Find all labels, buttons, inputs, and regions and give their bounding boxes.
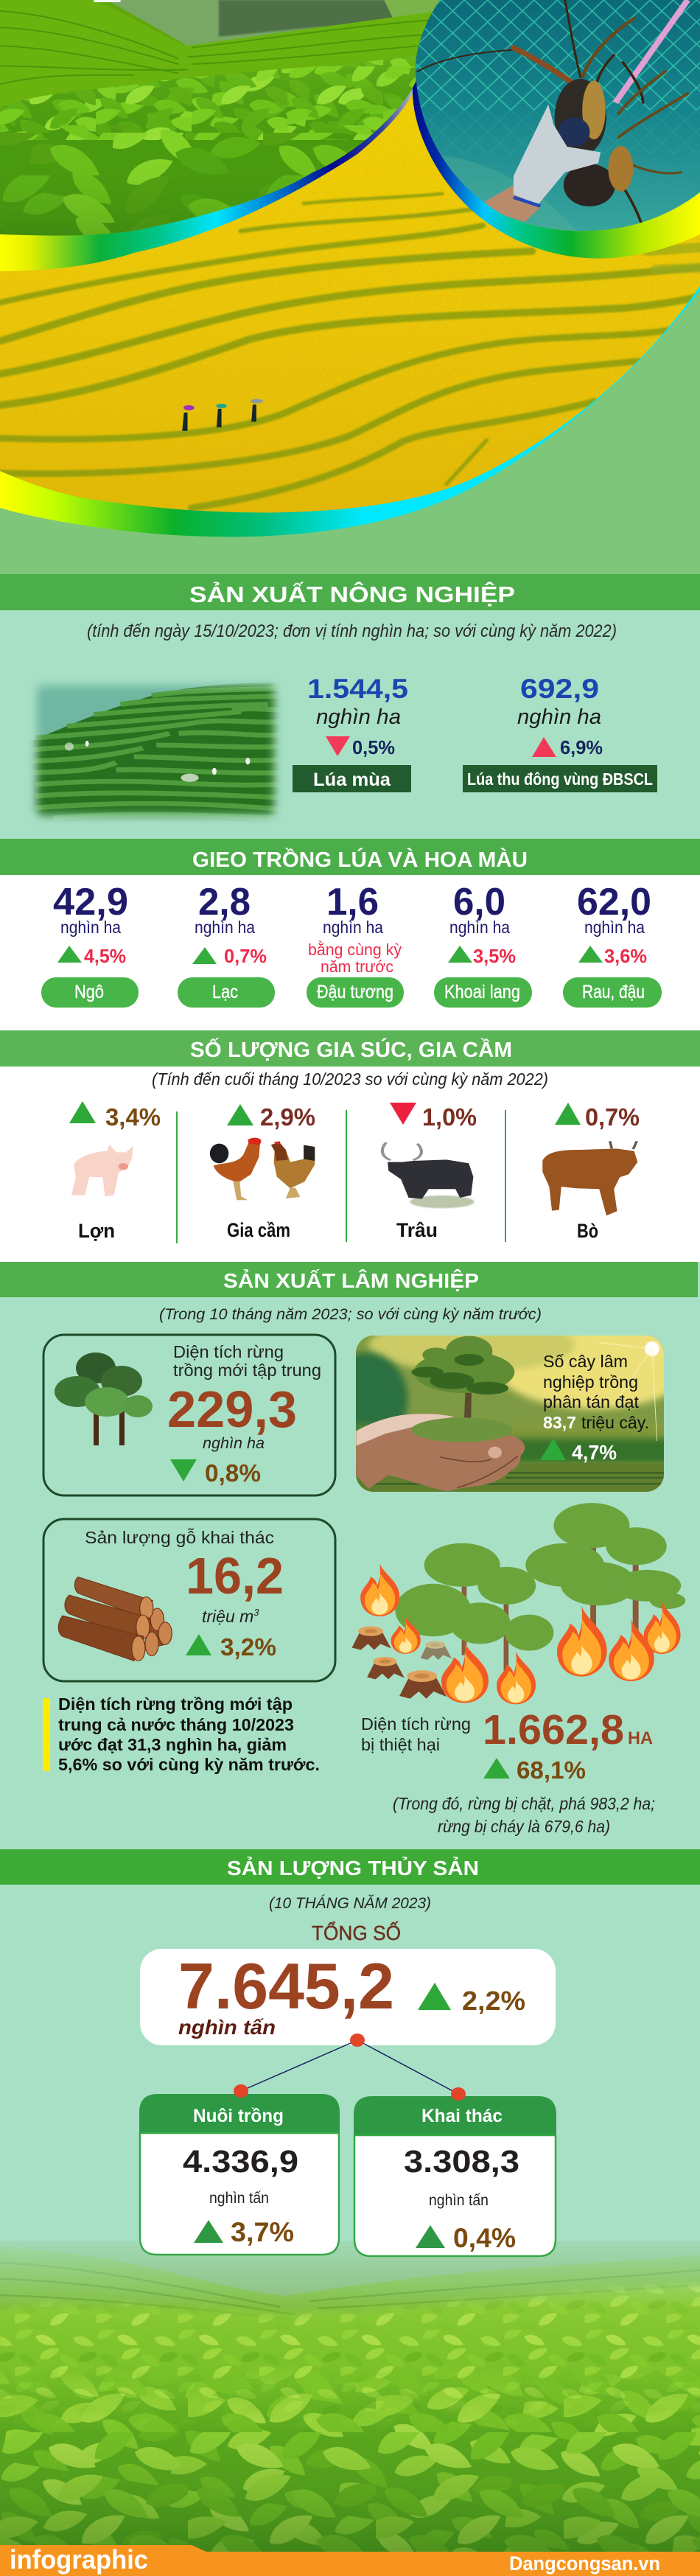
- hero photo collage: [0, 0, 700, 574]
- stat: ngô: nghìn ha: [60, 918, 121, 937]
- photo: tea hills and leaves: [0, 0, 447, 243]
- footer bar: infographic: [10, 2544, 148, 2575]
- card: khai thác: nghìn tấn: [429, 2192, 489, 2209]
- heading bar: GIEO TRỒNG LÚA VÀ HOA MÀU: [192, 847, 528, 872]
- stat: lúa thu đông: 6,9%: [560, 736, 603, 758]
- card: khai thác: Khai thác: [421, 2106, 503, 2126]
- card: timber output: 3,2%: [220, 1633, 276, 1661]
- note: new planted forest in October: trung cả nước tháng 10/2023: [58, 1715, 294, 1734]
- heading bar: SẢN XUẤT LÂM NGHIỆP: [223, 1268, 479, 1292]
- heading bar: SẢN XUẤT NÔNG NGHIỆP: [189, 581, 515, 607]
- card: scattered trees photo: triệu cây.: [581, 1413, 649, 1432]
- stat: lạc: 2,8: [198, 881, 251, 924]
- stat: lạc: 0,7%: [224, 945, 267, 967]
- stat: trâu: Trâu: [396, 1219, 438, 1241]
- stat: rau đậu: nghìn ha: [584, 918, 645, 937]
- stat: lạc: nghìn ha: [195, 918, 255, 937]
- stat: damaged forest area: Diện tích rừng: [361, 1714, 471, 1734]
- heading bar: SẢN LƯỢNG THỦY SẢN: [227, 1856, 479, 1879]
- photo: tea hills and leaves at bottom: [0, 2241, 700, 2552]
- icon: trees: [55, 1352, 153, 1445]
- subtitle: (tính đến ngày 15/10/2023; đơn vị tính nghìn ha; so với cùng kỳ năm 2022): [87, 621, 617, 641]
- stat: rau đậu: [563, 881, 662, 1008]
- icon: cow: [542, 1141, 637, 1215]
- stat: đậu tương: nghìn ha: [323, 918, 383, 937]
- stat: rau đậu: 3,6%: [604, 945, 647, 967]
- card: scattered trees photo: Số cây lâm: [543, 1352, 628, 1371]
- stat: ngô: 42,9: [53, 881, 128, 924]
- stat: lạc: [178, 881, 275, 1008]
- stat: damaged forest area: bị thiệt hại: [361, 1735, 440, 1754]
- stat: bò: 0,7%: [585, 1103, 640, 1131]
- note: new planted forest in October: ước đạt 31,3 nghìn ha, giảm: [58, 1735, 287, 1754]
- heading bar: SỐ LƯỢNG GIA SÚC, GIA CẦM: [190, 1037, 512, 1062]
- stat: đậu tương: năm trước: [321, 957, 393, 976]
- illustration: forest with fires and stumps: [352, 1503, 685, 1704]
- stat: lúa mùa: 0,5%: [352, 736, 395, 758]
- card: timber output: 3: [253, 1607, 259, 1618]
- total label: TỔNG SỐ: [312, 1921, 401, 1944]
- stat: damaged forest area: 1.662,8: [483, 1706, 624, 1753]
- stat: lúa thu đông: 692,9: [520, 674, 599, 704]
- card: timber output: triệu m: [202, 1607, 253, 1626]
- stat: khoai lang: nghìn ha: [449, 918, 510, 937]
- stat: damaged forest area: [361, 1706, 655, 1836]
- icon: rooster: [210, 1138, 262, 1200]
- curved gradient band under rice: [0, 286, 700, 537]
- stat: lúa mùa: 1.544,5: [307, 674, 408, 704]
- card: scattered trees photo: 83,7: [543, 1413, 576, 1432]
- photo: golden rice terraces: [0, 81, 700, 513]
- stat: damaged forest area: HA: [628, 1728, 653, 1748]
- subtitle: (Trong 10 tháng năm 2023; so với cùng kỳ năm trước): [159, 1306, 542, 1323]
- stat: bò: Bò: [577, 1220, 598, 1242]
- panel: sản xuất nông nghiệp: [0, 574, 700, 839]
- card: total: 7.645,2: [178, 1950, 394, 2022]
- card: total: nghìn tấn: [178, 2016, 276, 2039]
- curved gradient band under lobster: [413, 81, 700, 259]
- curved gradient band under tea: [0, 84, 416, 271]
- icon: pig: [71, 1145, 133, 1196]
- stat: trâu: [382, 1103, 477, 1241]
- icon: log pile: [58, 1577, 172, 1661]
- note: new planted forest in October: Diện tích rừng trồng mới tập: [58, 1694, 293, 1714]
- card: nuôi trồng: [139, 2094, 340, 2255]
- photo: terraced tea hill: [29, 681, 281, 823]
- heading bar: [0, 1262, 698, 1297]
- subtitle: (10 THÁNG NĂM 2023): [269, 1895, 431, 1912]
- note: new planted forest in October: 5,6% so với cùng kỳ năm trước.: [58, 1755, 320, 1774]
- heading bar: [0, 574, 700, 610]
- stat: lúa mùa: Lúa mùa: [313, 769, 391, 790]
- card: scattered trees photo: [356, 1336, 664, 1492]
- card: timber output: 16,2: [186, 1547, 284, 1605]
- stat: lúa thu đông: Lúa thu đông vùng ĐBSCL: [467, 769, 653, 789]
- stat: gia cầm: Gia cầm: [227, 1219, 290, 1241]
- stat: lợn: 3,4%: [105, 1103, 161, 1131]
- stat: lúa thu đông: [463, 674, 657, 792]
- panel: sản lượng thủy sản: [0, 1849, 700, 2256]
- card: scattered trees photo: 4,7%: [572, 1441, 617, 1464]
- card: nuôi trồng: nghìn tấn: [209, 2190, 269, 2207]
- stat: bò: [542, 1103, 640, 1242]
- card: khai thác: [354, 2096, 556, 2256]
- stat: damaged forest area: rừng bị cháy là 679,6 ha): [438, 1817, 610, 1836]
- stat: rau đậu: Rau, đậu: [582, 982, 645, 1002]
- stat: rau đậu: 62,0: [577, 881, 651, 924]
- stat: lúa mùa: [293, 674, 411, 792]
- card: scattered trees photo: nghiệp trồng: [543, 1372, 638, 1392]
- card: new planted forest area: nghìn ha: [203, 1435, 265, 1452]
- stat: khoai lang: Khoai lang: [444, 982, 520, 1002]
- stat: lúa mùa: nghìn ha: [316, 705, 401, 729]
- card: timber output: Sản lượng gỗ khai thác: [85, 1528, 274, 1547]
- stat: lúa thu đông: nghìn ha: [517, 705, 601, 729]
- footer bar: [0, 2544, 700, 2576]
- icon: buffalo: [382, 1142, 475, 1208]
- card: new planted forest area: trồng mới tập trung: [173, 1361, 321, 1380]
- panel background: [0, 610, 700, 839]
- panel: sản xuất lâm nghiệp: [0, 1262, 698, 1836]
- connector lines: [234, 2034, 466, 2101]
- footer bar: Dangcongsan.vn: [509, 2552, 660, 2575]
- panel: số lượng gia súc, gia cầm: [0, 1030, 700, 1262]
- stat: đậu tương: 1,6: [326, 881, 379, 924]
- stat: gia cầm: [210, 1103, 315, 1241]
- card: timber output: [43, 1519, 335, 1681]
- card: total: 2,2%: [462, 1986, 525, 2016]
- three figures with umbrellas: [182, 399, 263, 431]
- card: new planted forest area: 0,8%: [205, 1459, 261, 1487]
- heading bar: [0, 839, 700, 875]
- card: khai thác: 3.308,3: [404, 2144, 519, 2179]
- stat: gia cầm: 2,9%: [260, 1103, 315, 1131]
- stat: lợn: [69, 1101, 161, 1242]
- panel: gieo trồng lúa và hoa màu: [0, 839, 700, 1030]
- heading bar: [0, 1030, 700, 1067]
- stat: đậu tương: Đậu tương: [317, 982, 393, 1002]
- stat: khoai lang: [434, 881, 532, 1008]
- stat: lợn: Lợn: [78, 1220, 115, 1242]
- stat: đậu tương: bằng cùng kỳ: [308, 940, 402, 959]
- card: khai thác: 0,4%: [453, 2223, 516, 2253]
- card: new planted forest area: [43, 1335, 335, 1495]
- card: new planted forest area: 229,3: [167, 1381, 297, 1438]
- icon: hen: [271, 1141, 315, 1198]
- card: nuôi trồng: Nuôi trồng: [193, 2106, 284, 2126]
- card: total: [140, 1949, 556, 2045]
- card: nuôi trồng: 4.336,9: [183, 2144, 298, 2179]
- stat: khoai lang: 6,0: [453, 881, 505, 924]
- stat: ngô: 4,5%: [84, 945, 126, 967]
- stat: ngô: [41, 881, 139, 1008]
- photo: lobster held over net: [409, 0, 700, 240]
- subtitle: (Tính đến cuối tháng 10/2023 so với cùng kỳ năm 2022): [152, 1069, 548, 1089]
- stat: lạc: Lạc: [212, 982, 238, 1002]
- stat: damaged forest area: 68,1%: [517, 1756, 586, 1784]
- card: nuôi trồng: 3,7%: [231, 2217, 294, 2247]
- stat: đậu tương: [307, 881, 404, 1008]
- note: new planted forest in October: [43, 1694, 320, 1774]
- stat: damaged forest area: (Trong đó, rừng bị chặt, phá 983,2 ha;: [393, 1794, 655, 1813]
- stat: ngô: Ngô: [74, 982, 104, 1002]
- card: new planted forest area: Diện tích rừng: [173, 1342, 284, 1361]
- stat: khoai lang: 3,5%: [473, 945, 516, 967]
- card: scattered trees photo: phân tán đạt: [543, 1392, 640, 1411]
- heading bar: [0, 1849, 700, 1885]
- stat: trâu: 1,0%: [422, 1103, 477, 1131]
